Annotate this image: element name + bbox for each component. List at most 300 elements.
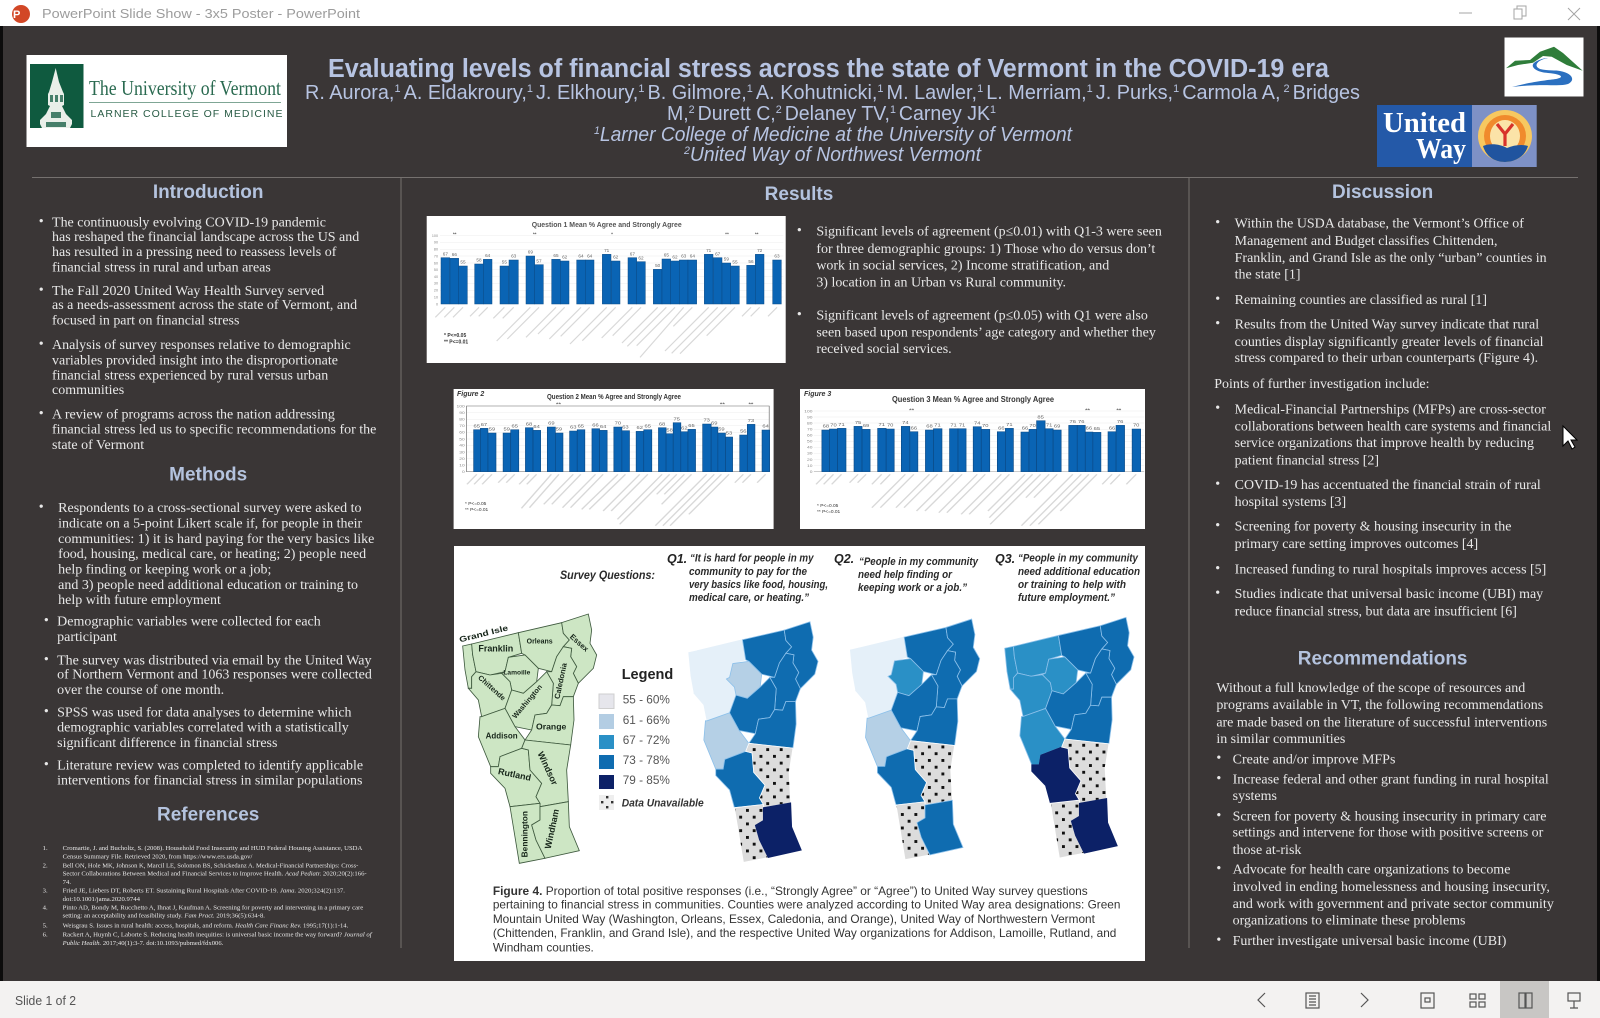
text block: discussion bullets: primary care setting improves outcomes [4] xyxy=(1235,537,1478,552)
bar chart: Question 1 xyxy=(427,216,786,363)
text block: methods bullets: significant difference in financial stress xyxy=(57,736,277,751)
bar chart: Question 2: 66 xyxy=(592,423,599,428)
text block: discussion bullets: service organizations that improve health by reducing xyxy=(1235,436,1534,451)
authors: 2 xyxy=(1280,83,1293,95)
bar chart: Question 3: 30 xyxy=(807,451,813,456)
bar chart: Question 1: 55 xyxy=(502,260,507,265)
text block: references list: Public Health. 2017;40(1):3-7. doi:10.1093/pubmed/fdx006. xyxy=(62,940,224,947)
text block: discussion bullets: Points of further investigation include: xyxy=(1214,377,1430,392)
text block: references list: setting: an acceptability and feasibility study. Fam Pract. 2019;36(5):634-8. xyxy=(63,913,265,920)
bar chart: Question 2: 65 xyxy=(645,424,651,429)
heading: Introduction: Introduction xyxy=(153,182,263,203)
text block: methods bullets: The survey was distributed via email by the United Way xyxy=(57,653,372,668)
choropleth map: Q3 xyxy=(1005,617,1134,858)
bar chart: Question 1: 72 xyxy=(757,248,763,253)
question 2 text xyxy=(834,552,979,594)
bar chart: Question 2: 90 xyxy=(459,411,465,415)
bar chart: Question 3 xyxy=(800,389,1145,529)
bar chart: Question 1: 20 xyxy=(434,289,438,293)
bar chart: Question 2: 10 xyxy=(459,463,465,467)
icon: PowerPoint: P xyxy=(13,9,20,21)
bar chart: Question 3: 71 xyxy=(959,423,965,428)
legend: 67 - 72% xyxy=(623,733,670,747)
logo: United Way: United xyxy=(1383,108,1466,139)
text block: methods bullets: indicate on a 5-point Likert scale if, for people in their xyxy=(58,517,363,532)
bar chart: Question 1: 70 xyxy=(434,254,438,258)
text block: methods bullets: of Northern Vermont and 1063 responses were collected xyxy=(57,668,372,683)
text block: introduction bullets: financial stress in rural and urban areas xyxy=(52,260,271,275)
bar chart: Question 3: 68 xyxy=(926,424,933,429)
text block: methods bullets: communities: 1) it is hard paying for the very basics like xyxy=(58,532,374,547)
text block: references list: Bell ON, Hole MK, Johnson K, Marcil LE, Solomon BS, Schickedanz A. Medical-Financial Partnerships: Cross- xyxy=(63,862,358,869)
bar chart: Question 2: Figure 2 xyxy=(457,391,484,398)
bar chart: Question 3: 70 xyxy=(830,423,837,428)
bar chart: Question 1: 50 xyxy=(434,268,438,272)
bar chart: Question 1: 62 xyxy=(613,255,619,260)
text block: results findings: Significant levels of agreement (p≤0.01) with Q1-3 were seen xyxy=(816,225,1162,240)
authors: A. Kohutnicki, xyxy=(756,82,877,104)
bar chart: Question 3: 70 xyxy=(982,424,989,429)
poster title: Evaluating levels of financial stress across the state of Vermont in the COVID-19 era xyxy=(328,55,1330,83)
text block: discussion bullets: collaborations between health care systems and financial xyxy=(1235,420,1551,435)
text block: discussion bullets: counties display significantly greater levels of financial xyxy=(1235,335,1544,350)
map: labelled Vermont counties: Bennington xyxy=(520,811,530,857)
text block: recommendations: in similar communities xyxy=(1216,732,1345,747)
question 3 text xyxy=(995,552,1140,604)
map: labelled Vermont counties: Orleans xyxy=(527,638,553,645)
question 1 text: “It is hard for people in my xyxy=(690,553,814,565)
authors: 1 xyxy=(747,83,756,95)
bar chart: Question 2: 68 xyxy=(526,422,532,427)
bar chart: Question 1: 55 xyxy=(460,260,466,265)
bar chart: Question 1: 40 xyxy=(434,275,438,279)
text block: discussion bullets: • xyxy=(1215,586,1220,601)
text block: methods bullets: Literature review was completed to identify applicable xyxy=(57,758,363,773)
figure 4 caption: Mountain United Way (Washington, Orleans, Essex, Caledonia, and Orange), United Way of Northwestern Vermont xyxy=(493,912,1095,926)
bar chart: Question 1: 71 xyxy=(604,248,610,253)
bar chart: Question 3: 76 xyxy=(1070,420,1076,425)
bar chart: Question 1: 65 xyxy=(664,253,669,258)
icon: PowerPoint xyxy=(12,5,30,23)
map: labelled Vermont counties: Franklin xyxy=(478,644,513,654)
bar chart: Question 1: * xyxy=(611,231,613,236)
bar chart: Question 3: * P<=0.05 xyxy=(817,503,839,509)
bar chart: Question 3: 100 xyxy=(804,409,813,413)
text block: discussion bullets: Remaining counties are classified as rural [1] xyxy=(1235,293,1487,308)
text block: recommendations: involved in ending homelessness and housing insecurity, xyxy=(1233,880,1550,895)
choropleth map: Q2 xyxy=(850,619,980,860)
text block: references list: 6. xyxy=(43,932,48,939)
text block: discussion bullets: Results from the United Way survey indicate that rural xyxy=(1235,318,1539,333)
bar chart: Question 3: 74 xyxy=(902,421,909,426)
map: labelled Vermont counties: Rutland xyxy=(497,766,532,783)
text block: recommendations: • xyxy=(1216,933,1221,948)
text block: recommendations: and work with government and private sector community xyxy=(1233,897,1554,912)
text block: methods bullets: over the course of one month. xyxy=(57,683,224,698)
bar chart: Question 2: 73 xyxy=(703,418,710,423)
text block: methods bullets: • xyxy=(44,704,49,719)
map: labelled Vermont counties: Grand Isle xyxy=(458,623,510,644)
bar chart: Question 2: 69 xyxy=(711,421,718,426)
bar chart: Question 1: ** xyxy=(453,231,457,236)
question 3 text: need additional education xyxy=(1018,566,1140,578)
map: labelled Vermont counties xyxy=(458,614,597,863)
authors: Carney JK xyxy=(899,103,991,125)
bar chart: Question 2: 70 xyxy=(615,421,621,426)
authors: R. Aurora, xyxy=(305,82,395,104)
text block: discussion bullets: the state [1] xyxy=(1235,268,1300,283)
bar chart: Question 1: 58 xyxy=(476,258,482,263)
bar chart: Question 1: 57 xyxy=(536,258,542,263)
bar chart: Question 1: 64 xyxy=(485,253,491,258)
window title bar xyxy=(0,0,1600,26)
text block: methods bullets: interventions for financial stress in similar populations xyxy=(57,774,362,789)
bar chart: Question 2: 59 xyxy=(718,427,725,432)
question 3 text: “People in my community xyxy=(1018,553,1139,565)
text block: references list: Sector Collaborations Between Medical and Financial Services to Improve Health. Acad Pediatr. 2020;20(2):166- xyxy=(63,871,367,878)
bar chart: Question 2: 62 xyxy=(681,426,688,431)
bar chart: Question 2: 65 xyxy=(578,424,584,429)
text block: introduction bullets: A review of programs across the nation addressing xyxy=(52,407,335,422)
bar chart: Question 2 xyxy=(454,389,774,529)
bar chart: Question 1: 30 xyxy=(434,282,438,286)
bar chart: Question 1: 69 xyxy=(528,250,533,255)
bar chart: Question 1: 59 xyxy=(724,257,729,262)
bar chart: Question 3: 69 xyxy=(1054,424,1061,429)
bar chart: Question 2: 63 xyxy=(622,425,629,430)
text block: methods bullets: Respondents to a cross-sectional survey were asked to xyxy=(58,501,361,516)
authors: 1 xyxy=(890,104,899,116)
text block: methods bullets: • xyxy=(44,613,49,628)
bar chart: Question 3: 66 xyxy=(1109,426,1115,431)
legend: 79 - 85% xyxy=(623,773,670,787)
map: labelled Vermont counties: Essex xyxy=(568,632,591,654)
logo: University of Vermont Larner College of Medicine: LARNER COLLEGE OF MEDICINE xyxy=(90,108,282,120)
text block: references list: Census Summary File. Retrieved 2020, from https://www.ers.usda.gov/ xyxy=(63,853,252,860)
text block: discussion bullets: Management and Budget classifies Chittenden, xyxy=(1235,234,1497,249)
bar chart: Question 3: 85 xyxy=(1037,415,1044,420)
text block: results findings: for three demographic groups: 1) Those who do versus don’t xyxy=(816,242,1155,257)
bar chart: Question 2: 50 xyxy=(459,437,465,441)
text block: recommendations: programs available in VT, the following recommendations xyxy=(1216,698,1543,713)
text block: results findings: 3) location in an Urban vs Rural community. xyxy=(816,276,1066,291)
bar chart: Question 2: 73 xyxy=(748,419,754,424)
bar chart: Question 3: 0 xyxy=(810,470,813,474)
bar chart: Question 2: 69 xyxy=(548,421,555,426)
text block: discussion bullets: • xyxy=(1215,519,1220,534)
text block: methods bullets: help with future employment xyxy=(58,593,221,608)
text block: results findings: seen based upon respondents’ age category and whether they xyxy=(816,326,1156,341)
bar chart: Question 2: 0 xyxy=(462,470,465,474)
logo: University of Vermont Larner College of Medicine xyxy=(26,55,287,147)
text block: discussion bullets: • xyxy=(1215,317,1220,332)
right column xyxy=(1214,182,1554,949)
text block: discussion bullets xyxy=(1214,216,1551,619)
text block: recommendations: settings and intervene for those with positive screens or xyxy=(1233,826,1544,841)
legend: 61 - 66% xyxy=(623,713,670,727)
text block: references list: doi:10.1001/jama.2020.9744 xyxy=(63,896,141,903)
text block: introduction bullets: focused in part on financial stress xyxy=(52,313,239,328)
bar chart: Question 3: ** xyxy=(1085,408,1091,413)
section dividers xyxy=(32,178,1578,948)
bar chart: Question 2: 30 xyxy=(459,450,465,454)
text block: introduction bullets: has reshaped the financial landscape across the US and xyxy=(52,230,359,245)
text block: methods bullets: and 3) people need additional education or training to xyxy=(58,578,358,593)
bar chart: Question 3: 50 xyxy=(807,439,813,444)
text block: discussion bullets: patient financial stress [2] xyxy=(1235,453,1379,468)
text block: recommendations xyxy=(1216,681,1554,949)
question 2 text: “People in my community xyxy=(859,556,979,568)
text block: recommendations: Further investigate universal basic income (UBI) xyxy=(1233,934,1507,949)
bar chart: Question 1: * P<=0.05 xyxy=(444,333,466,339)
text block: discussion bullets: Screening for poverty & housing insecurity in the xyxy=(1235,520,1511,535)
text block: introduction bullets: financial stress led us to specific recommendations for the xyxy=(52,423,376,438)
bar chart: Question 3: 70 xyxy=(887,423,894,428)
authors: 1 xyxy=(394,83,404,95)
bar chart: Question 1: 64 xyxy=(690,254,695,259)
left column xyxy=(39,182,376,825)
authors: J. Purks, xyxy=(1096,82,1173,104)
bar chart: Question 2: 62 xyxy=(637,426,643,431)
text block: methods bullets: participant xyxy=(57,630,117,645)
bar chart: Question 1: 55 xyxy=(732,260,738,265)
text block: methods bullets: • xyxy=(44,652,49,667)
bar chart: Question 1: 62 xyxy=(562,255,568,260)
bar chart: Question 2: 67 xyxy=(481,423,487,428)
heading: Methods: Methods xyxy=(169,465,247,486)
figure 4 caption: Figure 4. Proportion of total positive responses (i.e., “Strongly Agree” or “Agree”) to United Way survey questions xyxy=(493,884,1088,898)
question 1 text: community to pay for the xyxy=(689,566,807,578)
authors: Delaney TV, xyxy=(785,103,890,125)
bar chart: Question 3: 80 xyxy=(807,421,813,425)
map: labelled Vermont counties: Addison xyxy=(486,731,518,740)
map: labelled Vermont counties: Chittende xyxy=(476,673,507,702)
bar chart: Question 1: 71 xyxy=(706,248,712,253)
bar chart: Question 1: 67 xyxy=(630,251,635,256)
text block: introduction bullets: The continuously evolving COVID-19 pandemic xyxy=(52,216,326,231)
text block: results findings xyxy=(797,224,1162,357)
bar chart: Question 3: 70 xyxy=(807,427,813,432)
bar chart: Question 1: 63 xyxy=(681,254,687,259)
text block: references list: Weisgrau S. Issues in rural health: access, hospitals, and reform. Health Care Financ Rev. 1995;17(1):1-14. xyxy=(63,923,349,930)
text block: results findings: received social services. xyxy=(816,342,952,357)
text block: introduction bullets xyxy=(39,215,376,453)
bar chart: Question 2: 65 xyxy=(512,424,518,429)
text block: introduction bullets: The Fall 2020 United Way Health Survey served xyxy=(52,284,324,299)
question 3 text: or training to help with xyxy=(1018,579,1126,591)
bar chart: Question 2: 100 xyxy=(457,404,465,408)
slide counter: Slide 1 of 2 xyxy=(15,994,76,1008)
question 1 text: medical care, or heating.” xyxy=(689,592,809,604)
text block: methods bullets: Demographic variables were collected for each xyxy=(57,615,321,630)
bar chart: Question 2: 65 xyxy=(474,424,480,429)
figure 4 caption: pertaining to financial stress in communities. Counties were analyzed according to United Way area designations: Green xyxy=(493,898,1121,912)
bar chart: Question 1: 64 xyxy=(578,254,584,259)
bar chart: Question 3: 71 xyxy=(1006,423,1013,428)
text block: references list: 1. xyxy=(43,845,48,852)
bar chart: Question 2: 60 xyxy=(459,430,465,435)
map: labelled Vermont counties: Windham xyxy=(543,808,561,850)
text block: recommendations: • xyxy=(1216,772,1221,787)
logo: United Way: Way xyxy=(1416,134,1466,165)
bar chart: Question 2: 20 xyxy=(459,457,465,461)
text block: references list: Rackert A, Huynh C, Laborte S. Reducing health inequities: is universal basic income the way forward? Journal of xyxy=(63,932,373,939)
text block: discussion bullets: reduce financial stress, but data are insufficient [6] xyxy=(1235,604,1517,619)
heading: Results: Results xyxy=(765,184,833,205)
bar chart: Question 1: Question 1 Mean % Agree and Strongly Agree xyxy=(532,220,682,229)
bar chart: Question 3: 69 xyxy=(863,424,869,429)
text block: introduction bullets: has resulted in a pressing need to reassess levels of xyxy=(52,245,337,260)
affiliations: Larner College of Medicine at the University of Vermont xyxy=(600,124,1073,146)
question 2 text: keeping work or a job.” xyxy=(858,582,967,594)
map: labelled Vermont counties: Windsor xyxy=(536,750,560,787)
bar chart: Question 3: 60 xyxy=(807,433,813,438)
authors: L. Merriam, xyxy=(986,82,1087,104)
authors: 1 xyxy=(877,83,887,95)
text block: discussion bullets: • xyxy=(1215,292,1220,307)
text block: discussion bullets: Medical-Financial Partnerships (MFPs) are cross-sector xyxy=(1235,402,1546,417)
authors: 2 xyxy=(776,104,785,116)
map: labelled Vermont counties: Caledonia xyxy=(552,661,569,700)
bar chart: Question 2: 53 xyxy=(726,431,732,436)
affiliations xyxy=(594,124,1073,166)
text block: results findings: • xyxy=(797,224,802,239)
text block: references list: Fried JE, Liebers DT, Roberts ET. Sustaining Rural Hospitals After COVID-19. Jama. 2020;324(2):137. xyxy=(63,887,345,894)
bar chart: Question 3: ** P<=0.01 xyxy=(817,509,841,515)
text block: recommendations: • xyxy=(1216,861,1221,876)
window title text: PowerPoint Slide Show - 3x5 Poster - PowerPoint xyxy=(42,6,360,21)
bar chart: Question 3: 70 xyxy=(1029,424,1036,429)
bar chart: Question 3: ** xyxy=(909,408,915,413)
logo: United Way xyxy=(1377,105,1537,167)
question 2 text: need help finding or xyxy=(858,569,953,581)
authors: 1 xyxy=(527,83,536,95)
text block: discussion bullets: • xyxy=(1215,477,1220,492)
authors: M, xyxy=(667,103,689,125)
bar chart: Question 3: ** xyxy=(1116,408,1122,413)
bar chart: Question 3: 75 xyxy=(855,421,861,426)
bar chart: Question 1: 65 xyxy=(553,253,559,258)
text block: discussion bullets: Increased funding to rural hospitals improves access [5] xyxy=(1235,562,1546,577)
bar chart: Question 2: 59 xyxy=(489,427,495,432)
bar chart: Question 2: ** xyxy=(556,402,562,407)
bar chart: Question 1: 67 xyxy=(443,251,448,256)
bar chart: Question 3: 71 xyxy=(934,423,941,428)
bar chart: Question 3: 90 xyxy=(807,415,813,419)
text block: recommendations: Screen for poverty & housing insecurity in primary care xyxy=(1233,809,1546,824)
text block: introduction bullets: variables provided insight into the disproportionate xyxy=(52,353,338,368)
bar chart: Question 3: 71 xyxy=(950,423,957,428)
bar chart: Question 1: ** xyxy=(533,231,537,236)
bar chart: Question 1: 50 xyxy=(655,263,661,268)
bar chart: Question 1: ** xyxy=(725,231,729,236)
bar chart: Question 3: 76 xyxy=(1117,420,1123,425)
legend: Legend xyxy=(622,667,673,683)
question 1 text: very basics like food, housing, xyxy=(689,579,828,591)
bar chart: Question 3: 65 xyxy=(1094,427,1100,432)
bar chart: Question 1: 0 xyxy=(436,302,438,306)
bar chart: Question 3: 66 xyxy=(1022,426,1028,431)
icon: mouse cursor xyxy=(1563,426,1577,449)
text block: methods bullets: help finding or keeping work or a job; xyxy=(58,562,271,577)
authors xyxy=(305,82,1360,125)
text block: methods bullets: • xyxy=(44,757,49,772)
text block: discussion bullets: • xyxy=(1215,216,1220,231)
text block: discussion bullets: Studies indicate that universal basic income (UBI) may xyxy=(1235,587,1543,602)
text block: recommendations: Without a full knowledge of the scope of resources and xyxy=(1216,681,1525,696)
bar chart: Question 2: 70 xyxy=(459,424,465,428)
bar chart: Question 1: 67 xyxy=(715,251,721,256)
heading: References: References xyxy=(157,804,259,825)
bar chart: Question 3: Question 3 Mean % Agree and Strongly Agree xyxy=(892,395,1055,404)
bar chart: Question 2: 64 xyxy=(762,424,769,429)
legend: Data Unavailable xyxy=(622,798,704,810)
authors: 2 xyxy=(689,104,698,116)
text block: introduction bullets: • xyxy=(39,337,44,352)
text block: recommendations: those at-risk xyxy=(1233,843,1301,858)
text block: references list: 4. xyxy=(43,904,48,911)
bar chart: Question 3: 66 xyxy=(911,426,917,431)
question 1 text: Q1. xyxy=(667,552,687,566)
text block: introduction bullets: communities xyxy=(52,383,124,398)
authors: 1 xyxy=(977,83,986,95)
figure 4 caption xyxy=(493,884,1121,955)
bar chart: Question 3: 74 xyxy=(974,421,981,426)
bar chart: Question 2: ** P<=0.01 xyxy=(465,507,489,513)
affiliations: 1 xyxy=(594,125,600,137)
text block: methods bullets: • xyxy=(39,500,44,515)
bar chart: Question 3: 70 xyxy=(1133,423,1140,428)
text block: discussion bullets: COVID-19 has accentuated the financial strain of rural xyxy=(1235,478,1541,493)
bar chart: Question 1: 90 xyxy=(434,241,438,245)
bar chart: Question 3: 71 xyxy=(838,423,845,428)
heading: Recommendations: Recommendations xyxy=(1298,648,1467,669)
authors: 1 xyxy=(638,83,647,95)
bar chart: Question 2: 56 xyxy=(740,429,747,434)
text block: references list xyxy=(43,845,373,947)
bottom status bar xyxy=(0,981,1600,1018)
authors: Bridges xyxy=(1293,82,1360,104)
heading: Discussion: Discussion xyxy=(1332,182,1433,203)
bar chart: Question 1: 60 xyxy=(434,261,438,265)
text block: results findings: Significant levels of agreement (p≤0.05) with Q1 were also xyxy=(816,308,1148,323)
figure 4 caption: (Chittenden, Franklin, and Grand Isle), and the respective United Way organizations for Addison, Lamoille, Rutland, and xyxy=(493,926,1117,940)
authors: B. Gilmore, xyxy=(647,82,747,104)
window controls xyxy=(1459,6,1580,20)
legend: 73 - 78% xyxy=(623,753,670,767)
navigation and view icons xyxy=(1258,993,1580,1008)
bar chart: Question 2: 75 xyxy=(674,417,680,422)
text block: references list: Cromartie, J. and Bucholtz, S. (2008). Household Food Insecurity and HUD Federal Housing Assistance, USDA xyxy=(63,845,362,852)
text block: references list: 74. xyxy=(63,879,71,886)
text block: references list: Pinto AD, Bondy M, Rucchetto A, Ihnat J, Kaufman A. Screening for poverty and intervening in a primary care xyxy=(63,904,363,911)
bar chart: Question 1: 64 xyxy=(587,254,593,259)
question 2 text: Q2. xyxy=(834,552,854,566)
text block: introduction bullets: state of Vermont xyxy=(52,438,144,453)
bar chart: Question 3: 71 xyxy=(878,423,885,428)
text block: recommendations: are made based on the literature of successful interventions xyxy=(1216,716,1547,731)
question 1 text xyxy=(667,552,828,604)
text block: discussion bullets: stress compared to their urban counterparts (Figure 4). xyxy=(1235,351,1538,366)
text block: introduction bullets: financial stress experienced by rural versus urban xyxy=(52,369,328,384)
legend xyxy=(599,667,704,810)
text block: recommendations: Increase federal and other grant funding in rural hospital xyxy=(1233,773,1549,788)
bar chart: Question 1: 100 xyxy=(432,234,438,238)
text block: methods bullets: food, housing, medical care, or heating; 2) people need xyxy=(58,547,366,562)
text block: discussion bullets: Franklin, and Grand Isle as the only “urban” counties in xyxy=(1235,251,1547,266)
text block: discussion bullets: • xyxy=(1215,401,1220,416)
affiliations: 2 xyxy=(683,145,690,157)
